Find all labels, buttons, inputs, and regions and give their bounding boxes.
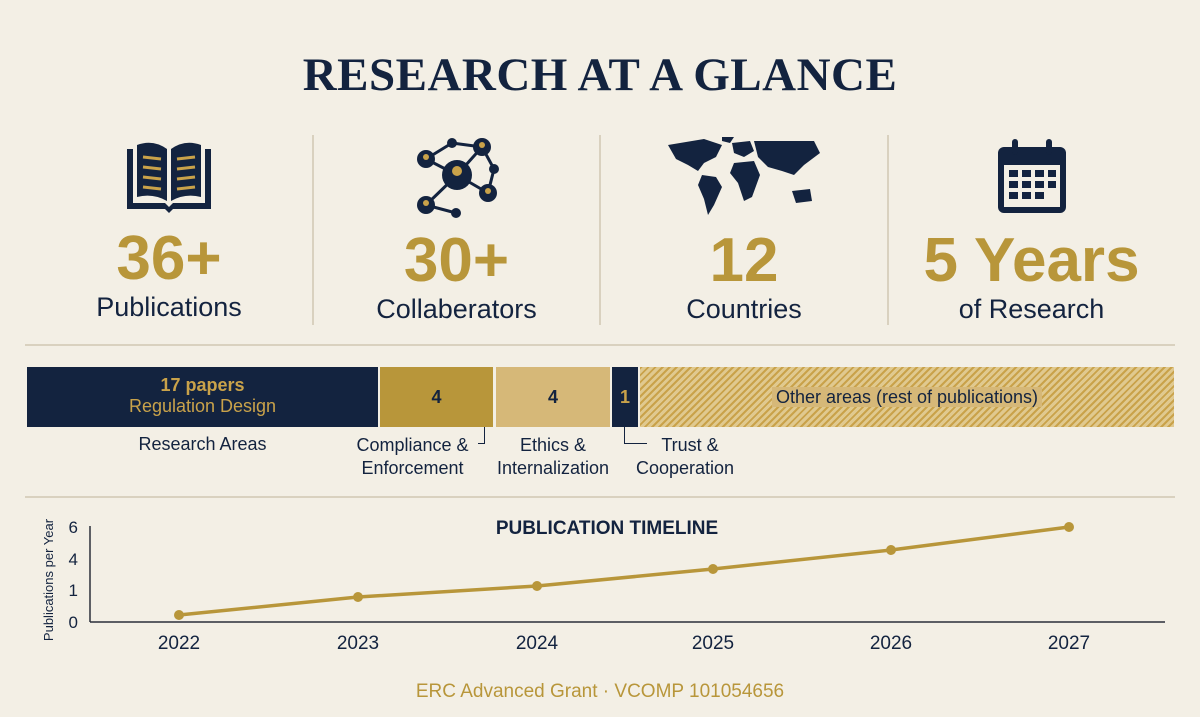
stat: publications: Publications [96,292,242,322]
stat: years: 5 Years [923,226,1140,295]
chart: publication timeline: 2027 [1048,633,1090,654]
text: Trust & [661,435,719,455]
stat: countries [668,137,820,324]
chart: publication timeline: 6 [69,518,78,537]
title: RESEARCH AT A GLANCE [303,49,897,101]
chart: publication timeline: 2024 [516,633,559,654]
chart: publication timeline: 2025 [692,633,734,654]
icon: network [417,138,499,218]
stat: collaborators [376,138,537,324]
stat: countries: Countries [686,294,802,324]
footer: ERC Advanced Grant · VCOMP 101054656 [416,681,784,702]
chart: publication timeline [41,518,1165,654]
segment: other areas [640,367,1174,427]
stat: collaborators: 30+ [404,226,509,295]
text: Ethics & [520,435,586,455]
chart title: PUBLICATION TIMELINE [496,518,718,539]
chart: publication timeline: 2023 [337,633,379,654]
text: Internalization [497,458,609,478]
chart: publication timeline: 2022 [158,633,200,654]
segment: trust: 1 [620,387,630,407]
text: Compliance & [356,435,469,455]
chart: publication timeline: 0 [69,613,78,632]
segment: regulation design [27,367,378,427]
segment: other areas: Other areas (rest of publications) [776,387,1038,407]
segment: ethics: 4 [548,387,558,407]
bar labels: Research Areas [138,434,267,454]
segment: trust [612,367,638,427]
chart: publication timeline: 1 [69,581,78,600]
text: Enforcement [361,458,464,478]
stat: publications: 36+ [116,224,222,293]
stat: countries: 12 [710,226,778,295]
stat: collaborators: Collaberators [376,294,537,324]
stat: publications [96,142,242,322]
stat: years [923,139,1140,324]
segment: ethics [496,367,610,427]
icon: open book [127,142,211,213]
segment: regulation design: 17 papers [160,375,245,395]
icon: world map [668,137,820,215]
icon: calendar [998,139,1066,213]
text: Cooperation [636,458,734,478]
chart: publication timeline: 2026 [870,633,912,654]
stat: years: of Research [959,294,1104,324]
chart: publication timeline: 4 [69,550,78,569]
segment: regulation design: Regulation Design [129,396,276,416]
chart: publication timeline: Publications per Year [41,518,56,641]
segment: compliance [380,367,493,427]
research areas bar [27,367,1174,427]
segment: compliance: 4 [431,387,442,407]
